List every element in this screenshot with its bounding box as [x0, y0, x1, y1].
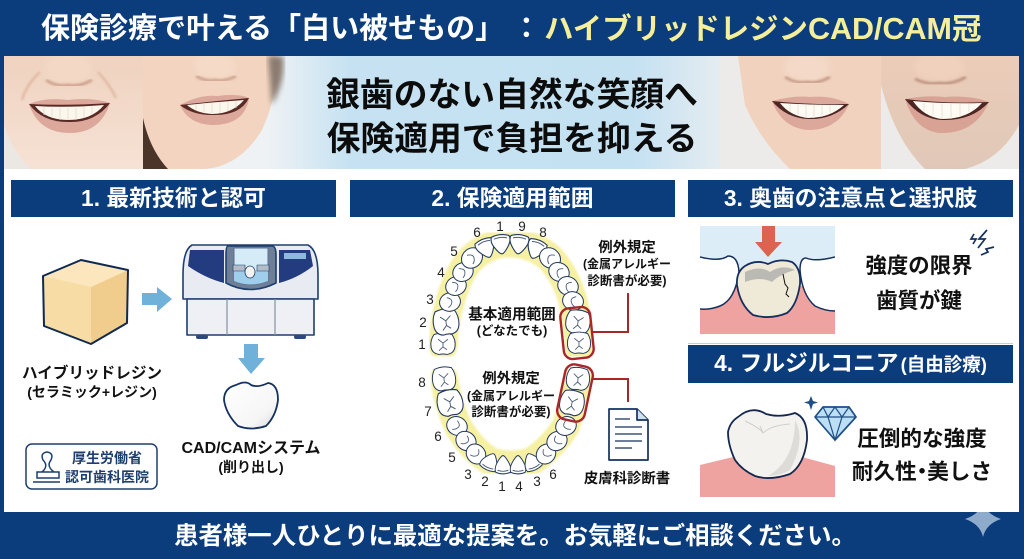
tooth numbers: 3 [464, 467, 472, 482]
tooth numbers: 5 [448, 450, 456, 465]
illustration: zirconia crown [700, 396, 857, 497]
callout: lower exception: 診断書が必要) [471, 404, 551, 419]
heading 2 [350, 180, 675, 217]
upper arch teeth [431, 234, 592, 354]
tooth numbers: 1 [498, 479, 506, 494]
icon: milling machine [183, 245, 318, 339]
heading 3 [688, 180, 1013, 217]
callout: lower exception: (金属アレルギー [467, 388, 555, 403]
tooth numbers: 4 [515, 479, 523, 494]
title text white: 保険診療で叶える「白い被せもの」 [41, 13, 504, 45]
heading 4: 4. フルジルコニア(自由診療) [714, 350, 987, 376]
callout: upper exception: 診断書が必要) [587, 273, 667, 288]
tooth numbers: 6 [549, 467, 557, 482]
hero panel with smiles [4, 56, 1019, 169]
tooth numbers: 9 [518, 219, 526, 234]
text: zirconia strength: 耐久性・美しさ [852, 459, 992, 484]
label: basic coverage [468, 305, 556, 338]
callout: lower exception: 例外規定 [482, 370, 540, 387]
title banner [0, 0, 1024, 56]
title text yellow: ハイブリッドレジンCAD/CAM冠 [544, 12, 981, 46]
callout: upper exception: (金属アレルギー [583, 256, 671, 271]
panel 1: latest technology [11, 180, 336, 490]
heading 2: 2. 保険適用範囲 [431, 185, 594, 211]
callout: lower exception [467, 363, 628, 423]
icon: sparkle [965, 512, 1001, 537]
panel 4: full zirconia [688, 345, 1013, 497]
label: basic coverage: 基本適用範囲 [468, 305, 556, 323]
tooth numbers: 1 [496, 219, 504, 234]
arrow: block to machine [142, 287, 172, 312]
footer message: 患者様一人ひとりに最適な提案を。お気軽にご相談ください。 [174, 523, 856, 550]
hero headline: 銀歯のない自然な笑顔へ [326, 76, 698, 114]
heading 3: 3. 奥歯の注意点と選択肢 [724, 185, 977, 211]
side frame right [1019, 0, 1024, 559]
divider [688, 343, 1013, 344]
illustration: cracked molar [700, 226, 835, 334]
face 4 [881, 53, 1019, 169]
heading 4 [688, 345, 1013, 383]
hero headline [326, 76, 698, 158]
label: dermatology certificate: 皮膚科診断書 [584, 469, 670, 487]
icon: resin block [43, 260, 128, 344]
panel 3: molar caution [688, 180, 1013, 334]
label: hybrid resin: (セラミック+レジン) [27, 384, 157, 400]
tooth numbers: 7 [424, 404, 432, 419]
label: hybrid resin [22, 363, 162, 400]
label: basic coverage: (どなたでも) [477, 323, 547, 338]
label: CAD/CAM system: CAD/CAMシステム [181, 440, 321, 457]
tooth numbers: 2 [481, 474, 489, 489]
process diagram [22, 244, 321, 490]
heading 1: 1. 最新技術と認可 [81, 185, 266, 211]
tooth numbers: 5 [450, 244, 458, 259]
lower arch teeth [431, 366, 591, 474]
tooth numbers: 6 [434, 429, 442, 444]
face 3 [720, 53, 881, 169]
text: strength limit: 歯質が鍵 [876, 289, 962, 313]
heading 1 [11, 180, 336, 217]
badge: approved clinic [26, 444, 157, 489]
text: zirconia strength: 圧倒的な強度 [857, 426, 987, 451]
hero headline: 保険適用で負担を抑える [327, 120, 697, 158]
callout: upper exception: 例外規定 [598, 239, 656, 256]
icon: lightning [970, 229, 994, 256]
tooth numbers: 1 [418, 337, 426, 352]
face 2 [143, 53, 284, 169]
face 1 [4, 53, 143, 169]
tooth numbers: 3 [426, 292, 434, 307]
icon: milled crown [224, 382, 278, 428]
icon: dermatology document [609, 409, 648, 460]
tooth numbers: 4 [437, 265, 445, 280]
smile photos [4, 56, 1019, 169]
footer banner [0, 512, 1024, 559]
label: CAD/CAM system: (削り出し) [218, 459, 284, 475]
panel 2: insurance coverage [350, 180, 675, 494]
badge: approved clinic: 厚生労働省 [72, 450, 142, 466]
tooth numbers: 8 [418, 375, 426, 390]
tooth numbers: 2 [419, 315, 427, 330]
label: CAD/CAM system [181, 440, 321, 475]
label: hybrid resin: ハイブリッドレジン [22, 363, 162, 382]
dental arch chart [418, 219, 671, 494]
tooth numbers [418, 219, 557, 494]
tooth numbers: 8 [539, 225, 547, 240]
badge: approved clinic: 認可歯科医院 [65, 469, 149, 485]
side frame left [0, 0, 4, 559]
arrow: machine to crown [238, 344, 265, 374]
text: strength limit: 強度の限界 [866, 254, 972, 278]
tooth numbers: 3 [533, 474, 541, 489]
text: zirconia strength [852, 426, 992, 484]
text: strength limit [866, 254, 972, 313]
callout: upper exception [559, 239, 671, 360]
tooth numbers: 6 [473, 225, 481, 240]
title colon: ： [512, 13, 541, 45]
